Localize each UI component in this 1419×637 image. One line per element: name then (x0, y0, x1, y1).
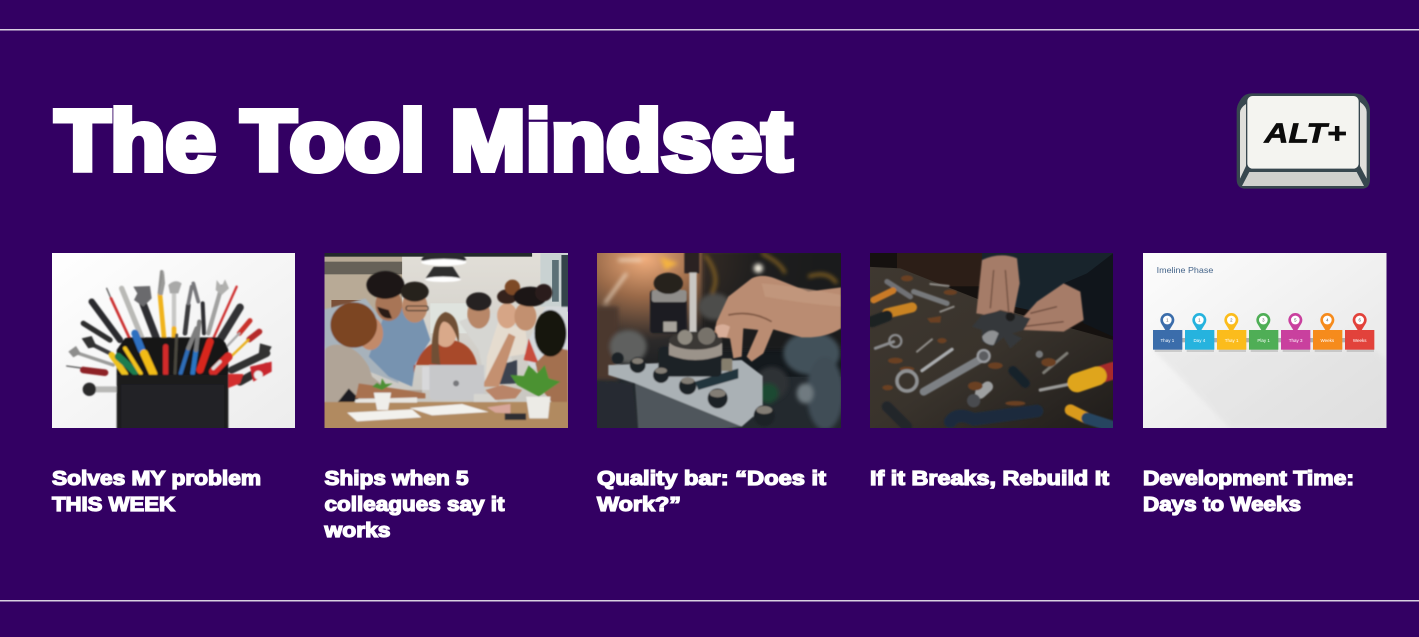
caption: Quality bar: “Does it (597, 467, 826, 490)
caption: Ships when 5 (324, 467, 468, 490)
panel: development time (1140, 250, 1390, 516)
timeline cards: 1 (1198, 318, 1201, 323)
caption (323, 467, 505, 542)
timeline cards: Weeks (1353, 338, 1367, 343)
timeline cards: 6 (1358, 318, 1361, 323)
timeline cards: Thay 1 (1160, 338, 1175, 343)
timeline cards: Day 4 (1193, 338, 1206, 343)
timeline cards: 1 (1166, 318, 1169, 323)
timeline cards: 5 (1294, 318, 1297, 323)
caption: Work?” (597, 493, 681, 516)
caption (52, 467, 261, 516)
image: timeline phase slide (1143, 253, 1386, 428)
caption: colleagues say it (324, 493, 505, 516)
icon: ALT+ keyboard key (1236, 93, 1370, 189)
caption: Solves MY problem (52, 467, 261, 490)
panel: if it breaks, rebuild it (867, 250, 1117, 490)
timeline cards: Thay 3 (1289, 338, 1303, 343)
timeline cards: 4 (1326, 318, 1329, 323)
caption (597, 467, 826, 516)
icon: ALT+ keyboard key: ALT+ (1263, 117, 1346, 148)
caption: THIS WEEK (52, 493, 175, 516)
caption (1143, 467, 1354, 516)
caption: Days to Weeks (1143, 493, 1301, 516)
timeline cards: Weeks (1320, 338, 1335, 343)
image: hands repairing a broken tool on a workbench (870, 253, 1113, 428)
image: tool pouch (52, 253, 295, 428)
timeline cards (1153, 313, 1374, 352)
caption: works (323, 519, 390, 542)
image: hand adjusting a machine (597, 253, 841, 428)
caption: Development Time: (1143, 467, 1354, 490)
timeline cards: 2 (1230, 318, 1233, 323)
image: colleagues around a laptop (324, 253, 568, 428)
image: timeline phase slide: Imeline Phase (1157, 265, 1214, 275)
timeline cards: 3 (1262, 318, 1265, 323)
title: The Tool Mindset (55, 94, 792, 189)
panel: solves my problem (50, 250, 300, 516)
panel: ships when 5 colleagues say it works (322, 250, 572, 542)
caption: If it Breaks, Rebuild It (870, 467, 1109, 490)
panel: quality bar (595, 250, 845, 516)
timeline cards: Thay 1 (1225, 338, 1239, 343)
timeline cards: Play 1 (1257, 338, 1270, 343)
